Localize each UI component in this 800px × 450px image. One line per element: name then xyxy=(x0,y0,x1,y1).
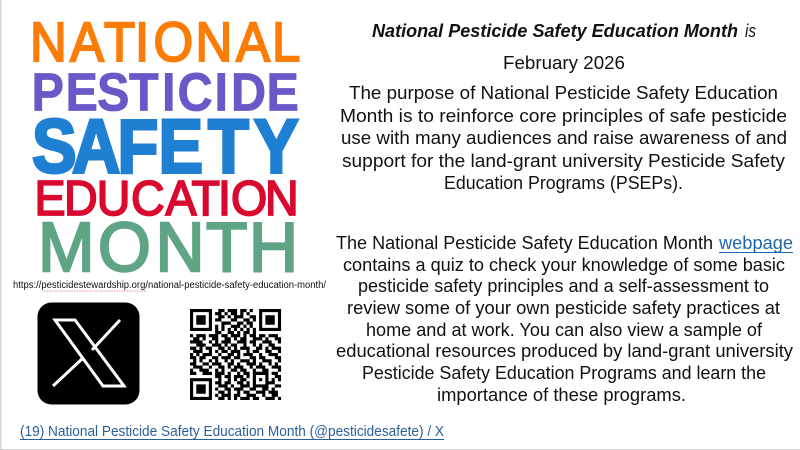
text block: webpage paragraph: contains a quiz to check your knowledge of some basic xyxy=(343,254,785,275)
heading: National Pesticide Safety Education Month is: is xyxy=(745,20,756,41)
link: webpage: webpage xyxy=(718,232,793,253)
logo word: EDUCATION: EDUCATION xyxy=(34,172,299,226)
text block: purpose paragraph: Education Programs (PSEPs). xyxy=(444,172,683,193)
text block: webpage paragraph: review some of your own pesticide safety practices at xyxy=(347,297,780,318)
text block: purpose paragraph: Month is to reinforce core principles of safe pesticide xyxy=(340,105,787,126)
QR code xyxy=(190,311,281,398)
icon: X logo xyxy=(38,302,140,404)
logo word: SAFETY: SAFETY xyxy=(32,105,299,189)
text block: webpage paragraph: importance of these programs. xyxy=(437,384,686,405)
logo word: NATIONAL: NATIONAL xyxy=(30,12,300,74)
text block: webpage paragraph: The National Pesticide Safety Education Month xyxy=(336,232,713,253)
text block: webpage paragraph: educational resources produced by land-grant university xyxy=(336,340,794,361)
heading: National Pesticide Safety Education Month is: National Pesticide Safety Education Month xyxy=(372,20,738,41)
link: X account: (19) National Pesticide Safety Education Month (@pesticidesafete) / X xyxy=(20,423,444,440)
logo source URL: https://pesticidestewardship.org/national-pesticide-safety-education-month/ xyxy=(13,280,326,291)
text block: purpose paragraph xyxy=(340,82,787,193)
logo word: MONTH: MONTH xyxy=(38,208,298,286)
text block: webpage paragraph: pesticide safety principles and a self-assessment to xyxy=(358,275,769,296)
text block: purpose paragraph: The purpose of National Pesticide Safety Education xyxy=(349,82,778,103)
logo: National Pesticide Safety Education Month wordmark xyxy=(30,12,300,286)
text block: purpose paragraph: support for the land-grant university Pesticide Safety xyxy=(342,150,786,171)
text block: webpage paragraph: Pesticide Safety Education Programs and learn the xyxy=(362,362,766,383)
text block: webpage paragraph xyxy=(336,232,794,405)
text block: webpage paragraph: home and at work. You can also view a sample of xyxy=(366,319,763,340)
text block: purpose paragraph: use with many audiences and raise awareness of and xyxy=(341,127,787,148)
heading: February 2026: February 2026 xyxy=(503,52,625,73)
logo word: PESTICIDE: PESTICIDE xyxy=(32,61,299,122)
